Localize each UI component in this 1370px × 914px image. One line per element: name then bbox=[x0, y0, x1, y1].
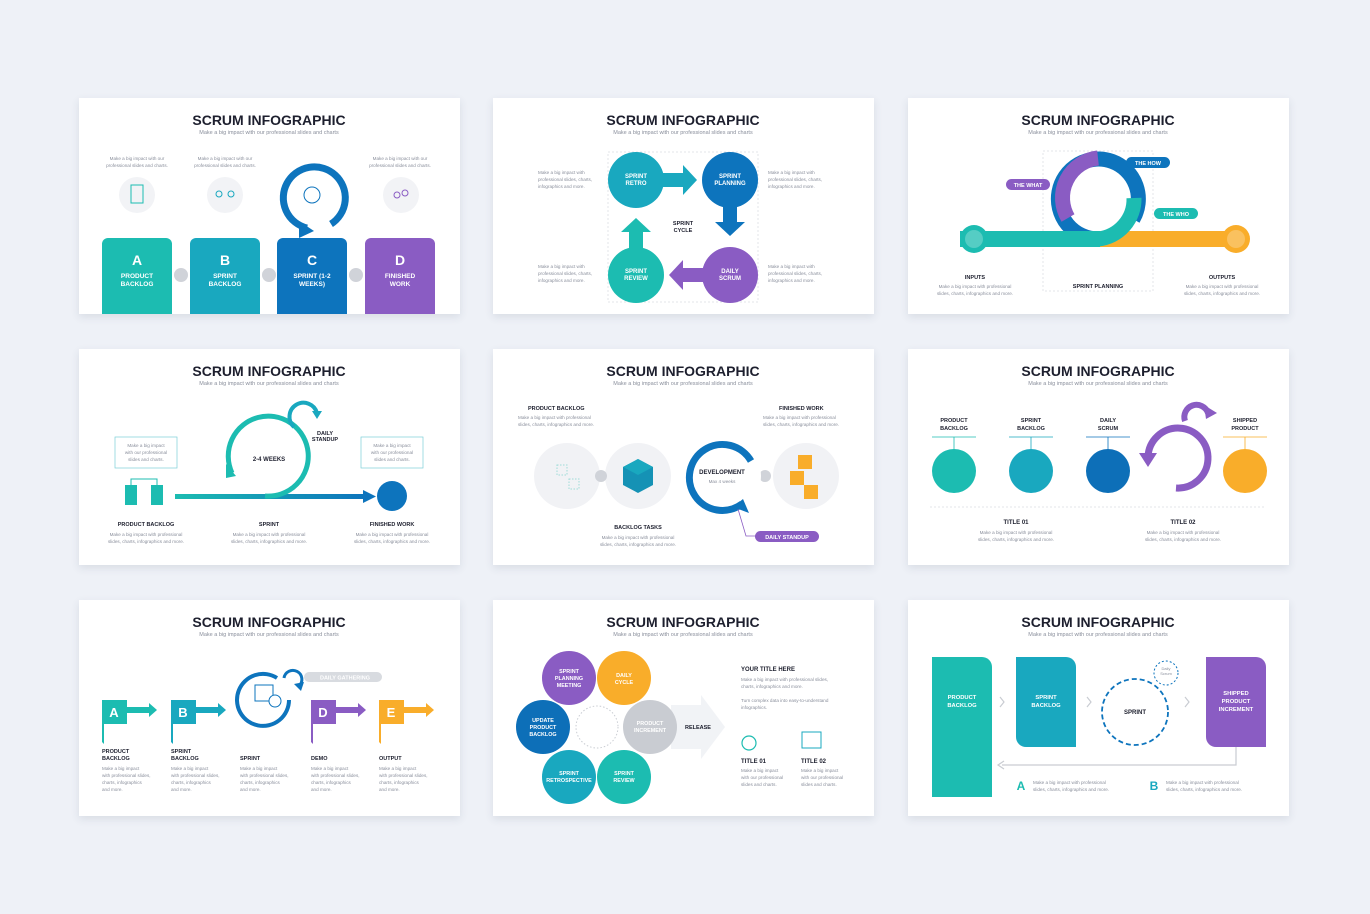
slide 1: product backlog to finished work: professional slides and charts. bbox=[194, 163, 256, 168]
slide 8: circle cycle with release: TITLE 02 bbox=[801, 759, 827, 765]
slide 6: backlog to shipped product: SPRINT bbox=[1021, 418, 1042, 424]
slide 7: flags A to E: DEMO bbox=[311, 756, 328, 762]
slide 7: flags A to E: SPRINT bbox=[240, 756, 261, 762]
slide 7: flags A to E: Make a big impact bbox=[102, 766, 140, 771]
slide 7: flags A to E: Make a big impact with our professional slides and charts bbox=[199, 632, 339, 638]
slide 9: backlog sprint shipped: Daily bbox=[1162, 666, 1170, 671]
slide 7: flags A to E: D bbox=[318, 705, 328, 720]
slide 7: flags A to E: charts, infographics bbox=[171, 780, 212, 785]
slide 4: sprint loop: slides and charts. bbox=[374, 457, 410, 462]
slide 9: backlog sprint shipped: PRODUCT bbox=[948, 695, 977, 701]
slide 8: circle cycle with release: Make a big impact bbox=[741, 768, 779, 773]
slide 3: sprint planning inputs outputs: THE WHAT bbox=[1014, 183, 1043, 189]
slide 3: sprint planning inputs outputs: THE HOW bbox=[1135, 161, 1162, 167]
slide 9: backlog sprint shipped: BACKLOG bbox=[1031, 703, 1061, 709]
slide 5: development flow: PRODUCT BACKLOG bbox=[528, 406, 585, 412]
slide 7: flags A to E: BACKLOG bbox=[171, 756, 199, 762]
slide 7: flags A to E: B bbox=[178, 705, 188, 720]
slide 2: sprint cycle: SPRINT bbox=[625, 269, 647, 275]
slide 9: backlog sprint shipped: BACKLOG bbox=[947, 703, 977, 709]
slide 6: backlog to shipped product: PRODUCT bbox=[940, 418, 968, 424]
slide 6: backlog to shipped product: slides, charts, infographics and more. bbox=[978, 537, 1054, 542]
slide 2: sprint cycle: SPRINT bbox=[719, 174, 741, 180]
slide 1: product backlog to finished work: BACKLOG bbox=[121, 281, 153, 288]
slide 6: backlog to shipped product: SHIPPED bbox=[1233, 418, 1257, 424]
slide 6: backlog to shipped product: PRODUCT bbox=[1231, 426, 1259, 432]
slide 6: backlog to shipped product bbox=[908, 349, 1289, 565]
slide 1: product backlog to finished work: professional slides and charts. bbox=[106, 163, 168, 168]
slide 7: flags A to E: with professional slides, bbox=[171, 773, 220, 778]
slide 9: backlog sprint shipped: slides, charts, infographics and more. bbox=[1033, 787, 1109, 792]
slide 9: backlog sprint shipped: slides, charts, infographics and more. bbox=[1166, 787, 1242, 792]
slide 6: backlog to shipped product: BACKLOG bbox=[940, 426, 968, 432]
slide 2: sprint cycle: infographics and more. bbox=[768, 184, 815, 189]
slide 7: flags A to E: SCRUM INFOGRAPHIC bbox=[192, 614, 346, 630]
slide 8: circle cycle with release: Make a big impact bbox=[801, 768, 839, 773]
slide 9: backlog sprint shipped: INCREMENT bbox=[1219, 707, 1254, 713]
slide 4: sprint loop bbox=[79, 349, 460, 565]
slide 8: circle cycle with release: RETROSPECTIVE bbox=[546, 778, 592, 784]
slide 7: flags A to E: and more. bbox=[171, 787, 192, 792]
slide 4: sprint loop: slides, charts, infographics and more. bbox=[231, 539, 307, 544]
slide 7: flags A to E: Make a big impact bbox=[171, 766, 209, 771]
slide 1: product backlog to finished work: B bbox=[220, 252, 230, 268]
slide 3: sprint planning inputs outputs: INPUTS bbox=[965, 275, 985, 281]
slide 3: sprint planning inputs outputs: SCRUM INFOGRAPHIC bbox=[1021, 112, 1175, 128]
slide 4: sprint loop: Make a big impact with professional bbox=[356, 532, 428, 537]
slide 8: circle cycle with release: TITLE 01 bbox=[741, 759, 767, 765]
slide 1: product backlog to finished work: FINISHED bbox=[385, 273, 415, 280]
slide 4: sprint loop: Make a big impact with professional bbox=[233, 532, 305, 537]
slide 8: circle cycle with release: UPDATE bbox=[532, 718, 554, 724]
slide 8: circle cycle with release: MEETING bbox=[557, 683, 581, 689]
slide 6: backlog to shipped product: SCRUM bbox=[1098, 426, 1118, 432]
slide 4: sprint loop: slides, charts, infographics and more. bbox=[108, 539, 184, 544]
slide 9: backlog sprint shipped: SCRUM INFOGRAPHIC bbox=[1021, 614, 1175, 630]
slide 6: backlog to shipped product: Make a big impact with professional bbox=[1147, 530, 1219, 535]
slide 7: flags A to E: Make a big impact bbox=[379, 766, 417, 771]
slide 8: circle cycle with release: PLANNING bbox=[555, 676, 583, 682]
slide 3: sprint planning inputs outputs bbox=[908, 98, 1289, 314]
slide 1: product backlog to finished work: C bbox=[307, 252, 317, 268]
slide 1: product backlog to finished work: WEEKS) bbox=[299, 281, 325, 288]
slide 8: circle cycle with release: with our professional bbox=[801, 775, 843, 780]
slide 7: flags A to E: A bbox=[109, 705, 119, 720]
slide 1: product backlog to finished work: PRODUCT bbox=[121, 273, 153, 280]
slide 8: circle cycle with release: slides and charts. bbox=[801, 782, 837, 787]
slide 1: product backlog to finished work: A bbox=[132, 252, 142, 268]
slide 3: sprint planning inputs outputs: Make a big impact with our professional slides and charts bbox=[1028, 130, 1168, 136]
slide 4: sprint loop: slides and charts. bbox=[128, 457, 164, 462]
slide 7: flags A to E: Make a big impact bbox=[240, 766, 278, 771]
slide 5: development flow: slides, charts, infographics and more. bbox=[600, 542, 676, 547]
slide 1: product backlog to finished work: SPRINT (1-2 bbox=[293, 273, 331, 280]
slide 1: product backlog to finished work: Make a big impact with our bbox=[198, 156, 253, 161]
slide 2: sprint cycle: SPRINT bbox=[625, 174, 647, 180]
slide 1: product backlog to finished work: WORK bbox=[390, 281, 411, 288]
slide 3: sprint planning inputs outputs: THE WHO bbox=[1163, 212, 1190, 218]
slide 8: circle cycle with release: YOUR TITLE HERE bbox=[741, 667, 795, 673]
slide 2: sprint cycle: DAILY bbox=[721, 269, 739, 275]
slide 2: sprint cycle: infographics and more. bbox=[768, 278, 815, 283]
slide 3: sprint planning inputs outputs: OUTPUTS bbox=[1209, 275, 1235, 281]
slide 8: circle cycle with release: infographics. bbox=[741, 705, 767, 710]
slide 8: circle cycle with release: PRODUCT bbox=[637, 721, 664, 727]
slide 3: sprint planning inputs outputs: SPRINT PLANNING bbox=[1073, 284, 1123, 290]
slide 2: sprint cycle: SCRUM bbox=[719, 276, 741, 282]
slide 8: circle cycle with release: SPRINT bbox=[559, 771, 580, 777]
slide 2: sprint cycle: SCRUM INFOGRAPHIC bbox=[606, 112, 760, 128]
slide 7: flags A to E: charts, infographics bbox=[311, 780, 352, 785]
slide 6: backlog to shipped product: slides, charts, infographics and more. bbox=[1145, 537, 1221, 542]
slide 4: sprint loop: SCRUM INFOGRAPHIC bbox=[192, 363, 346, 379]
slide 9: backlog sprint shipped: Make a big impact with professional bbox=[1166, 780, 1239, 785]
slide 8: circle cycle with release: CYCLE bbox=[615, 680, 634, 686]
slide 5: development flow: Max 4 weeks bbox=[709, 479, 736, 484]
slide 8: circle cycle with release: BACKLOG bbox=[529, 732, 557, 738]
slide 1: product backlog to finished work: BACKLOG bbox=[209, 281, 241, 288]
slide 3: sprint planning inputs outputs: Make a big impact with professional bbox=[939, 284, 1011, 289]
slide 3: sprint planning inputs outputs: slides, charts, infographics and more. bbox=[937, 291, 1013, 296]
slide 5: development flow: Make a big impact with our professional slides and charts bbox=[613, 381, 753, 387]
slide 8: circle cycle with release: INCREMENT bbox=[634, 728, 667, 734]
slide 6: backlog to shipped product: Make a big impact with professional bbox=[980, 530, 1052, 535]
slide 8: circle cycle with release: Make a big impact with professional slides, bbox=[741, 677, 828, 682]
slide 2: sprint cycle: REVIEW bbox=[624, 276, 648, 282]
slide 1: product backlog to finished work: Make a big impact with our bbox=[110, 156, 165, 161]
slide 3: sprint planning inputs outputs: Make a big impact with professional bbox=[1186, 284, 1258, 289]
slide 6: backlog to shipped product: BACKLOG bbox=[1017, 426, 1045, 432]
slide 7: flags A to E: charts, infographics bbox=[379, 780, 420, 785]
slide 8: circle cycle with release: REVIEW bbox=[613, 778, 636, 784]
slide 9: backlog sprint shipped: SHIPPED bbox=[1223, 691, 1249, 697]
slide 2: sprint cycle: Make a big impact with our professional slides and charts bbox=[613, 130, 753, 136]
slide 2: sprint cycle: Make a big impact with bbox=[538, 170, 585, 175]
slide 4: sprint loop: FINISHED WORK bbox=[370, 522, 414, 528]
slide 2: sprint cycle: PLANNING bbox=[714, 181, 746, 187]
slide 1: product backlog to finished work: Make a big impact with our professional slides and charts bbox=[199, 130, 339, 136]
slide 7: flags A to E: charts, infographics bbox=[240, 780, 281, 785]
slide 4: sprint loop: 2-4 WEEKS bbox=[253, 457, 285, 463]
slide 8: circle cycle with release: Turn complex data into easy-to-understand bbox=[741, 698, 829, 703]
slide 2: sprint cycle: infographics and more. bbox=[538, 184, 585, 189]
slide 4: sprint loop: SPRINT bbox=[259, 522, 280, 528]
slide 4: sprint loop: Make a big impact bbox=[127, 443, 165, 448]
slide 5: development flow: DEVELOPMENT bbox=[699, 470, 745, 476]
slide 5: development flow: SCRUM INFOGRAPHIC bbox=[606, 363, 760, 379]
slide 7: flags A to E: E bbox=[387, 705, 396, 720]
slide 8: circle cycle with release: SPRINT bbox=[614, 771, 635, 777]
slide 2: sprint cycle: professional slides, charts, bbox=[768, 271, 822, 276]
slide 2: sprint cycle: infographics and more. bbox=[538, 278, 585, 283]
slide 1: product backlog to finished work: SPRINT bbox=[213, 273, 237, 280]
slide 6: backlog to shipped product: Make a big impact with our professional slides and charts bbox=[1028, 381, 1168, 387]
slide 1: product backlog to finished work: Make a big impact with our bbox=[373, 156, 428, 161]
slide 7: flags A to E: and more. bbox=[102, 787, 123, 792]
slide 8: circle cycle with release bbox=[493, 600, 874, 816]
slide 7: flags A to E: and more. bbox=[240, 787, 261, 792]
slide 5: development flow: Make a big impact with professional bbox=[602, 535, 674, 540]
slide 2: sprint cycle: Make a big impact with bbox=[538, 264, 585, 269]
slide 7: flags A to E: BACKLOG bbox=[102, 756, 130, 762]
slide 9: backlog sprint shipped: Make a big impact with professional bbox=[1033, 780, 1106, 785]
slide 3: sprint planning inputs outputs: slides, charts, infographics and more. bbox=[1184, 291, 1260, 296]
slide 2: sprint cycle: CYCLE bbox=[674, 228, 693, 234]
slide 4: sprint loop: PRODUCT BACKLOG bbox=[118, 522, 174, 528]
slide 5: development flow: slides, charts, infographics and more. bbox=[518, 422, 594, 427]
slide 6: backlog to shipped product: TITLE 01 bbox=[1003, 520, 1029, 526]
slide 4: sprint loop: Make a big impact with professional bbox=[110, 532, 182, 537]
slide 9: backlog sprint shipped: A bbox=[1017, 779, 1026, 793]
slide 6: backlog to shipped product: SCRUM INFOGRAPHIC bbox=[1021, 363, 1175, 379]
slide 2: sprint cycle: Make a big impact with bbox=[768, 170, 815, 175]
slide 1: product backlog to finished work bbox=[79, 98, 460, 314]
slide 8: circle cycle with release: SCRUM INFOGRAPHIC bbox=[606, 614, 760, 630]
slide 1: product backlog to finished work: professional slides and charts. bbox=[369, 163, 431, 168]
slide 5: development flow: FINISHED WORK bbox=[779, 406, 824, 412]
slide 5: development flow: DAILY STANDUP bbox=[765, 535, 809, 541]
slide 7: flags A to E bbox=[79, 600, 460, 816]
slide 5: development flow: Make a big impact with professional bbox=[763, 415, 836, 420]
slide 7: flags A to E: OUTPUT bbox=[379, 756, 402, 762]
slide 5: development flow: Make a big impact with professional bbox=[518, 415, 591, 420]
slide 9: backlog sprint shipped: B bbox=[1150, 779, 1159, 793]
slide 4: sprint loop: STANDUP bbox=[312, 437, 338, 443]
slide 7: flags A to E: and more. bbox=[379, 787, 400, 792]
slide 7: flags A to E: with professional slides, bbox=[379, 773, 428, 778]
slide 2: sprint cycle: Make a big impact with bbox=[768, 264, 815, 269]
slide 6: backlog to shipped product: TITLE 02 bbox=[1170, 520, 1196, 526]
slide 5: development flow bbox=[493, 349, 874, 565]
slide 7: flags A to E: DAILY GATHERING bbox=[320, 676, 370, 682]
slide 8: circle cycle with release: RELEASE bbox=[685, 725, 711, 731]
slide 7: flags A to E: with professional slides, bbox=[240, 773, 289, 778]
slide 1: product backlog to finished work: D bbox=[395, 252, 405, 268]
slide 9: backlog sprint shipped: PRODUCT bbox=[1222, 699, 1251, 705]
slide 9: backlog sprint shipped bbox=[908, 600, 1289, 816]
slide 7: flags A to E: with professional slides, bbox=[311, 773, 360, 778]
slide 8: circle cycle with release: DAILY bbox=[616, 673, 632, 679]
slide 1: product backlog to finished work: SCRUM INFOGRAPHIC bbox=[192, 112, 346, 128]
slide 2: sprint cycle: professional slides, charts, bbox=[538, 271, 592, 276]
slide 8: circle cycle with release: charts, infographics and more. bbox=[741, 684, 803, 689]
slide 5: development flow: BACKLOG TASKS bbox=[614, 525, 662, 531]
slide 6: backlog to shipped product: DAILY bbox=[1100, 418, 1116, 424]
slide 8: circle cycle with release: Make a big impact with our professional slides and charts bbox=[613, 632, 753, 638]
slide 2: sprint cycle: professional slides, charts, bbox=[768, 177, 822, 182]
slide 2: sprint cycle: professional slides, charts, bbox=[538, 177, 592, 182]
slide 8: circle cycle with release: with our professional bbox=[741, 775, 783, 780]
slide 9: backlog sprint shipped: Scrum bbox=[1160, 671, 1172, 676]
slide 2: sprint cycle: SPRINT bbox=[673, 221, 694, 227]
slide 7: flags A to E: SPRINT bbox=[171, 749, 192, 755]
slide 2: sprint cycle: RETRO bbox=[626, 181, 647, 187]
slide 4: sprint loop: DAILY bbox=[317, 431, 333, 437]
slide 9: backlog sprint shipped: SPRINT bbox=[1124, 710, 1146, 716]
slide 4: sprint loop: with our professional bbox=[125, 450, 167, 455]
slide 8: circle cycle with release: PRODUCT bbox=[530, 725, 557, 731]
slide 7: flags A to E: Make a big impact bbox=[311, 766, 349, 771]
slide 7: flags A to E: with professional slides, bbox=[102, 773, 151, 778]
slide 4: sprint loop: Make a big impact with our professional slides and charts bbox=[199, 381, 339, 387]
slide 7: flags A to E: PRODUCT bbox=[102, 749, 130, 755]
slide 9: backlog sprint shipped: SPRINT bbox=[1035, 695, 1057, 701]
slide 7: flags A to E: charts, infographics bbox=[102, 780, 143, 785]
slide 8: circle cycle with release: SPRINT bbox=[559, 669, 580, 675]
slide 2: sprint cycle bbox=[493, 98, 874, 314]
slide 4: sprint loop: slides, charts, infographics and more. bbox=[354, 539, 430, 544]
slide 7: flags A to E: and more. bbox=[311, 787, 332, 792]
slide 9: backlog sprint shipped: Make a big impact with our professional slides and charts bbox=[1028, 632, 1168, 638]
slide 4: sprint loop: with our professional bbox=[371, 450, 413, 455]
slide 8: circle cycle with release: slides and charts. bbox=[741, 782, 777, 787]
slide 4: sprint loop: Make a big impact bbox=[373, 443, 411, 448]
slide 5: development flow: slides, charts, infographics and more. bbox=[763, 422, 839, 427]
